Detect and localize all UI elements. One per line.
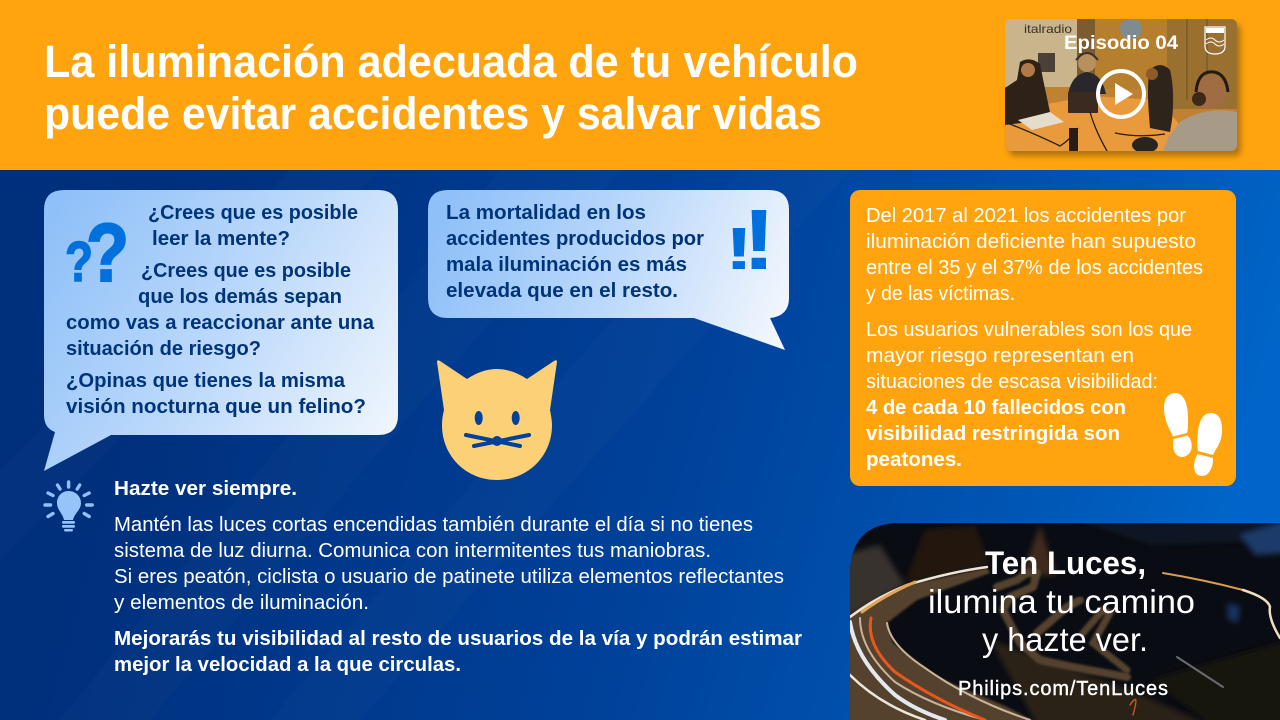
statistics highlight: visibilidad restringida son	[866, 423, 1120, 445]
mortality text: accidentes producidos por	[446, 228, 704, 250]
mortality text: mala iluminación es más	[446, 254, 687, 276]
questions text: como vas a reaccionar ante una	[66, 312, 375, 334]
episode label: Episodio 04	[1064, 32, 1178, 54]
icon: exclamation marks: !	[742, 193, 776, 288]
statistics text: Del 2017 al 2021 los accidentes por	[866, 205, 1186, 227]
statistics text: entre el 35 y el 37% de los accidentes	[866, 257, 1203, 279]
statistics text: situaciones de escasa visibilidad:	[866, 371, 1158, 393]
icon: question marks: ?	[65, 230, 93, 294]
title: puede evitar accidentes y salvar vidas	[44, 88, 822, 139]
campaign text: Philips.com/TenLuces	[958, 678, 1168, 700]
icon: exclamation marks: !	[724, 216, 754, 282]
questions text: ¿Opinas que tienes la misma	[66, 370, 346, 392]
speech bubble: questions	[44, 190, 398, 471]
advice text	[114, 514, 784, 614]
statistics highlight: peatones.	[866, 449, 962, 471]
icon: exclamation marks	[724, 193, 776, 288]
icon: question marks: ?	[86, 206, 129, 299]
mortality text	[446, 202, 704, 302]
questions text: situación de riesgo?	[66, 338, 261, 360]
campaign text: y hazte ver.	[982, 621, 1148, 658]
advice text: Si eres peatón, ciclista o usuario de patinete utiliza elementos reflectantes	[114, 566, 784, 588]
advice text: sistema de luz diurna. Comunica con intermitentes tus maniobras.	[114, 540, 711, 562]
questions text	[66, 202, 375, 418]
icon: light bulb	[45, 482, 92, 532]
advice heading: Hazte ver siempre.	[114, 478, 297, 500]
title	[44, 36, 858, 139]
speech bubble: mortality	[428, 190, 789, 350]
road	[850, 568, 1034, 720]
statistics text: mayor riesgo representan en	[866, 345, 1134, 367]
questions text: leer la mente?	[152, 228, 290, 250]
statistics text: iluminación deficiente han supuesto	[866, 231, 1196, 253]
advice conclusion	[114, 628, 802, 676]
statistics highlight: 4 de cada 10 fallecidos con	[866, 397, 1126, 419]
icon: cat face	[437, 360, 557, 480]
header band	[0, 0, 1280, 170]
title: La iluminación adecuada de tu vehículo	[44, 36, 858, 87]
icon: question marks	[65, 206, 129, 299]
questions text: ¿Crees que es posible	[141, 260, 351, 282]
campaign text: Ten Luces,	[985, 545, 1146, 581]
icon: footprints	[1164, 393, 1222, 476]
advice conclusion: mejor la velocidad a la que circulas.	[114, 654, 461, 676]
mortality text: elevada que en el resto.	[446, 280, 678, 302]
video thumbnail: episode 04	[1005, 18, 1241, 156]
background	[0, 170, 1280, 720]
panel: campaign photo	[835, 515, 1280, 720]
advice text: y elementos de iluminación.	[114, 592, 369, 614]
questions text: que los demás sepan	[138, 286, 342, 308]
mortality text: La mortalidad en los	[446, 202, 646, 224]
statistics highlight	[866, 397, 1126, 471]
questions text: ¿Crees que es posible	[148, 202, 358, 224]
statistics text	[866, 205, 1203, 393]
campaign text: ilumina tu camino	[928, 583, 1195, 620]
icon: philips shield	[1205, 27, 1225, 54]
advice text: Mantén las luces cortas encendidas también durante el día si no tienes	[114, 514, 753, 536]
statistics text: Los usuarios vulnerables son los que	[866, 319, 1192, 341]
statistics text: y de las víctimas.	[866, 283, 1015, 305]
panel: statistics	[850, 190, 1236, 486]
advice conclusion: Mejorarás tu visibilidad al resto de usuarios de la vía y podrán estimar	[114, 628, 802, 650]
campaign text	[928, 545, 1195, 700]
video thumbnail: episode 04: italradio	[1024, 22, 1072, 36]
questions text: visión nocturna que un felino?	[66, 396, 366, 418]
icon: play button	[1098, 71, 1144, 117]
